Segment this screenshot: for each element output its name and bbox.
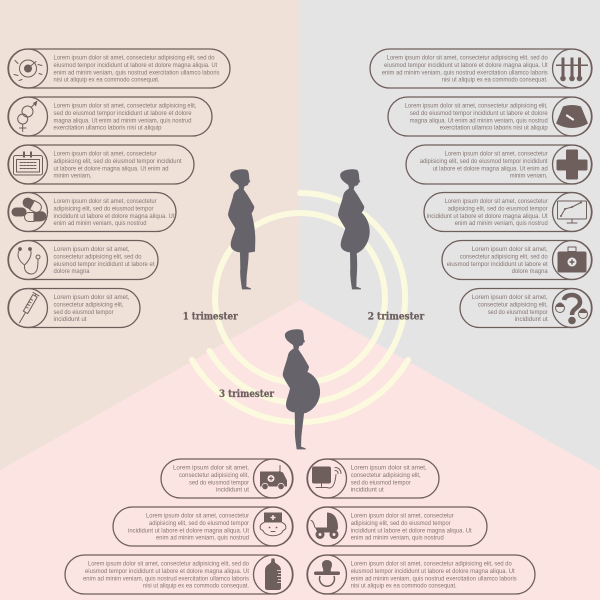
text block: eiusmod tempor incididunt ut labore et dolore magna aliqua. Ut <box>85 568 249 575</box>
text block <box>382 55 548 84</box>
panel: right item 1 <box>370 49 592 88</box>
text block: nisi ut aliquip ex ea commodo consequat. <box>54 77 160 84</box>
icon: pacifier <box>314 560 340 586</box>
text block: sed do eiusmod tempor incididunt ut labore et dolore <box>410 110 548 117</box>
text block: ut labore et dolore magna aliqua. Ut enim ad <box>433 165 548 172</box>
text block: incididunt ut <box>54 316 87 323</box>
text block: adipisicing elit, sed do eiusmod tempor <box>448 206 548 213</box>
text block: minim veniam, <box>510 173 548 180</box>
icon: ultrasound scan <box>556 105 588 128</box>
icon: ambulance <box>260 466 287 490</box>
text block <box>54 55 220 84</box>
panel: left item 5 <box>8 240 158 280</box>
icon: gender symbols <box>18 100 38 132</box>
spiral rings <box>192 193 408 422</box>
text block: incididunt ut labore et dolore magna aliqua. Ut <box>427 213 548 220</box>
text block: Lorem ipsum dolor sit amet, consectetur <box>445 198 548 205</box>
text block <box>405 103 548 132</box>
text block: eiusmod tempor incididunt ut labore et dolore magna aliqua. Ut <box>54 62 217 69</box>
icon: first aid kit <box>558 247 586 272</box>
text block: consectetur adipisicing elit, sed do <box>460 253 548 260</box>
text block <box>128 513 250 542</box>
text block: minim veniam, <box>54 173 92 180</box>
text block: consectetur adipisicing elit, <box>54 301 124 308</box>
text block: incididunt ut labore et dolore magna aliqua. Ut <box>128 527 249 534</box>
text block <box>351 561 517 590</box>
text block: enim ad minim veniam, quis nostrud <box>351 535 444 542</box>
text block: enim ad minim veniam, quis nostrud exercitation ullamco laboris <box>382 69 548 76</box>
label: 3 trimester: 3 trimester <box>219 389 275 400</box>
woman: first trimester <box>228 169 255 289</box>
woman: second trimester <box>338 169 370 289</box>
text block: eiusmod tempor incididunt ut labore et <box>447 261 548 268</box>
text block: Lorem ipsum dolor sit amet, consectetur <box>146 513 249 520</box>
panel: right item 4 <box>424 192 592 232</box>
text block <box>472 294 548 323</box>
label: 2 trimester: 2 trimester <box>368 312 425 322</box>
icon: stethoscope <box>18 247 40 274</box>
text block: adipisicing elit, sed do eiusmod tempor <box>351 520 451 527</box>
text block: eiusmod tempor incididunt ut labore et dolore magna aliqua. Ut <box>351 568 515 575</box>
text block: consectetur adipisicing elit, <box>351 472 421 479</box>
panel: bottom left item 1 <box>161 459 293 498</box>
text block: exercitation ullamco laboris nisi ut aliquip <box>440 125 548 132</box>
text block: Lorem ipsum dolor sit amet, <box>351 465 427 472</box>
woman: third trimester <box>283 329 320 449</box>
text block: Lorem ipsum dolor sit amet, <box>472 246 548 253</box>
text block: magna aliqua. Ut enim ad minim veniam, quis nostrud <box>54 117 192 124</box>
text block: consectetur adipisicing elit, <box>179 472 249 479</box>
text block: consectetur adipisicing elit, sed do <box>54 253 142 260</box>
icon: egg and sperm <box>14 60 42 80</box>
text block: sed do eiusmod tempor <box>189 479 249 486</box>
icon: baby stroller <box>311 512 338 539</box>
text block: ut labore et dolore magna aliqua. Ut enim ad <box>54 165 169 172</box>
panel: bottom right item 1 <box>307 459 439 498</box>
panel: left item 2 <box>8 97 212 136</box>
text block: incididunt ut labore et dolore magna aliqua. Ut <box>54 213 175 220</box>
text block: nisi ut aliquip ex ea commodo consequat. <box>351 583 457 590</box>
text block: Lorem ipsum dolor sit amet, <box>472 294 548 301</box>
icon: monitor with signal <box>312 466 341 488</box>
icon: test tubes <box>556 58 588 81</box>
text block: nisi ut aliquip ex ea commodo consequat. <box>143 583 249 590</box>
icon: monitor chart <box>558 201 586 223</box>
text block: adipisicing elit, sed do eiusmod tempor incididunt <box>54 158 182 165</box>
text block <box>427 198 548 227</box>
text block: nisi ut aliquip ex ea commodo consequat. <box>442 77 548 84</box>
text block: Lorem ipsum dolor sit amet, consectetur <box>54 151 156 158</box>
label: 1 trimester: 1 trimester <box>183 312 238 322</box>
text block <box>54 103 197 132</box>
text block: Lorem ipsum dolor sit amet, consectetur <box>351 513 454 520</box>
panel: bottom right item 2 <box>307 507 487 546</box>
text block: consectetur adipisicing elit, <box>478 301 548 308</box>
text block: Lorem ipsum dolor sit amet, consectetur adipisicing elit, sed do <box>88 561 250 568</box>
text block: enim ad minim veniam, quis nostrud exercitation ullamco laboris <box>351 575 517 582</box>
text block: enim ad minim veniam, quis nostrud exercitation ullamco laboris <box>83 575 249 582</box>
text block: adipisicing elit, sed do eiusmod tempor <box>54 206 154 213</box>
panel: left item 4 <box>8 192 176 232</box>
text block <box>54 246 155 275</box>
text block <box>54 198 175 227</box>
text block: Lorem ipsum dolor sit amet, consectetur adipisicing elit, <box>405 103 548 110</box>
text block: enim ad minim veniam, quis nostrud <box>54 220 147 227</box>
text block: Lorem ipsum dolor sit amet, consectetur adipisicing elit, sed do <box>351 561 512 568</box>
text block: adipisicing elit, sed do eiusmod tempor <box>149 520 249 527</box>
text block <box>351 513 472 542</box>
text block: enim ad minim veniam, quis nostrud <box>156 535 250 542</box>
panel: left item 3 <box>8 145 194 184</box>
text block <box>83 561 250 590</box>
text block: dolore magna <box>54 268 90 275</box>
text block: Lorem ipsum dolor sit amet, <box>173 465 249 472</box>
text block <box>54 294 130 323</box>
text block: exercitation ullamco laboris nisi ut aliquip <box>54 125 162 132</box>
text block <box>447 246 548 275</box>
text block: adipisicing elit, sed do eiusmod tempor incididunt <box>420 158 548 165</box>
text block: sed do eiusmod tempor <box>54 309 114 316</box>
panel: right item 5 <box>442 240 592 280</box>
icon: calendar <box>14 152 42 175</box>
icon: baby nurse face <box>260 512 286 536</box>
panel: bottom right item 3 <box>307 555 535 594</box>
icon: syringe <box>16 292 39 324</box>
text block: Lorem ipsum dolor sit amet, consectetur <box>445 151 548 158</box>
text block: enim ad minim veniam, quis nostrud exercitation ullamco laboris <box>54 69 220 76</box>
panel: left item 1 <box>8 49 230 88</box>
text block <box>420 151 548 180</box>
text block: Lorem ipsum dolor sit amet, consectetur adipisicing elit, sed do <box>54 55 215 62</box>
icon: baby bottle <box>265 558 281 590</box>
panel: bottom left item 3 <box>65 555 293 594</box>
panel: bottom left item 2 <box>113 507 293 546</box>
text block: Lorem ipsum dolor sit amet, consectetur <box>54 198 156 205</box>
text block: incididunt ut <box>351 487 384 494</box>
icon: capsules <box>12 196 46 222</box>
text block: incididunt ut <box>216 487 249 494</box>
panel: left item 6 <box>8 288 140 328</box>
icon: medical cross <box>556 150 588 180</box>
text block: dolore magna <box>512 268 548 275</box>
text block: eiusmod tempor incididunt ut labore et dolore magna aliqua. Ut <box>384 62 548 69</box>
text block: magna aliqua. Ut enim ad minim veniam, quis nostrud <box>410 117 548 124</box>
text block: sed do eiusmod tempor <box>351 479 411 486</box>
text block: enim ad minim veniam, quis nostrud <box>455 220 548 227</box>
text block: Lorem ipsum dolor sit amet, <box>54 246 130 253</box>
text block <box>351 465 427 494</box>
panel: right item 6 <box>460 288 592 328</box>
icon: question mark with babies <box>556 295 588 324</box>
text block: Lorem ipsum dolor sit amet, consectetur adipisicing elit, sed do <box>387 55 548 62</box>
text block <box>173 465 249 494</box>
text block: Lorem ipsum dolor sit amet, consectetur adipisicing elit, <box>54 103 197 110</box>
panel: right item 2 <box>388 97 592 136</box>
text block: eiusmod tempor incididunt ut labore et <box>54 261 155 268</box>
text block <box>54 151 182 180</box>
text block: incididunt ut <box>515 316 548 323</box>
text block: Lorem ipsum dolor sit amet, <box>54 294 130 301</box>
panel: right item 3 <box>406 145 592 184</box>
text block: incididunt ut labore et dolore magna aliqua. Ut <box>351 527 472 534</box>
text block: sed do eiusmod tempor incididunt ut labore et dolore <box>54 110 192 117</box>
text block: sed do eiusmod tempor <box>488 309 548 316</box>
